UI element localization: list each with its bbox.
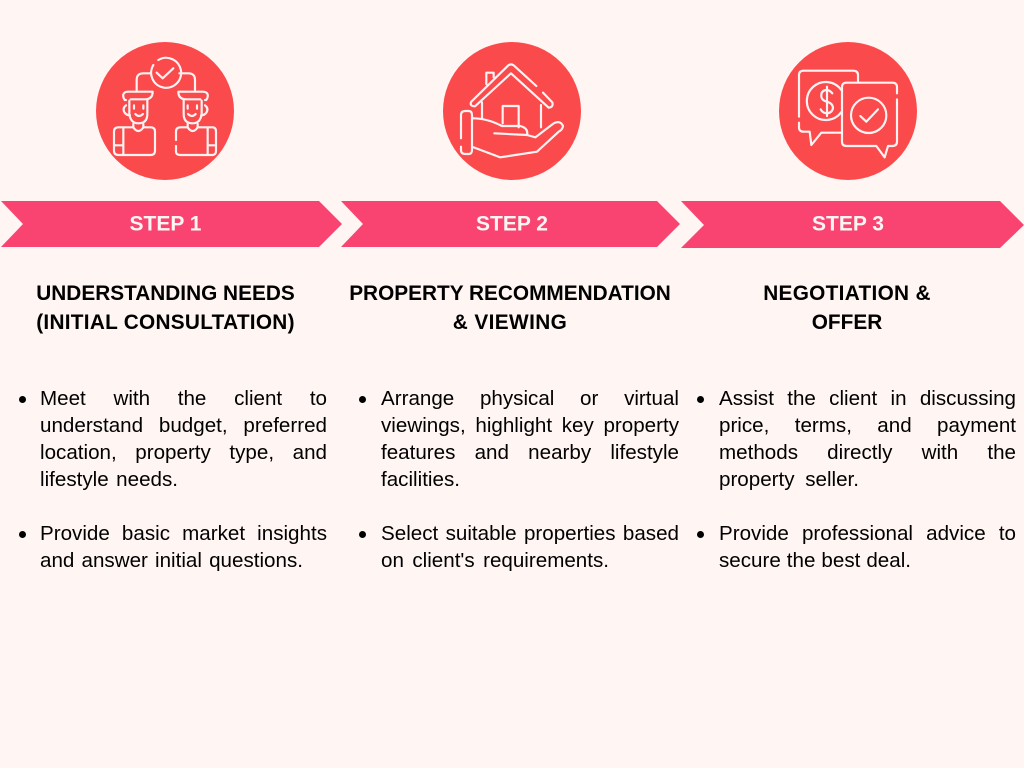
text block: step 2 bullets: facilities. xyxy=(381,468,460,491)
text block: step 1 bullets xyxy=(19,387,327,572)
text block: step 3 bullets: price, terms, and payment xyxy=(719,414,1016,437)
heading: step 3 title xyxy=(763,282,931,334)
text block: step 2 bullets: features and nearby lifestyle xyxy=(381,441,679,464)
text block: step 3 bullets: secure the best deal. xyxy=(719,549,911,572)
text block: step 3 bullets xyxy=(697,387,1016,572)
heading: step 2 title: PROPERTY RECOMMENDATION xyxy=(349,282,671,304)
heading: step 3 title: NEGOTIATION & xyxy=(763,282,931,304)
text block: step 3 bullets: Provide professional advice to xyxy=(719,522,1016,545)
heading: step 2 title xyxy=(349,282,671,334)
heading: step 1 title: (INITIAL CONSULTATION) xyxy=(36,310,295,334)
banner: step 3 xyxy=(681,201,1024,248)
text block: step 2 bullets: viewings, highlight key property xyxy=(381,414,679,437)
icon: price negotiation speech bubbles xyxy=(779,42,917,180)
text block: step 2 bullets: Arrange physical or virtual xyxy=(381,387,679,410)
text block: step 1 bullets: Meet with the client to xyxy=(40,387,327,410)
text block: step 2 bullets: Select suitable properties based xyxy=(381,522,679,545)
heading: step 2 title: & VIEWING xyxy=(453,310,567,334)
text block: step 2 bullets: on client's requirements. xyxy=(381,549,609,572)
text block: step 1 bullets: understand budget, preferred xyxy=(40,414,327,437)
icon: two people agreeing xyxy=(96,42,234,180)
banner: step 1 xyxy=(1,201,342,247)
text block: step 1 bullets: lifestyle needs. xyxy=(40,468,178,491)
heading: step 1 title: UNDERSTANDING NEEDS xyxy=(36,282,295,304)
text block: step 3 bullets: Assist the client in discussing xyxy=(719,387,1016,410)
heading: step 3 title: OFFER xyxy=(812,310,882,334)
heading: step 1 title xyxy=(36,282,295,334)
icon: house on hand xyxy=(443,42,581,180)
banner: step 1: STEP 1 xyxy=(130,212,202,236)
text block: step 2 bullets xyxy=(359,387,679,572)
text block: step 1 bullets: location, property type, and xyxy=(40,441,327,464)
text block: step 3 bullets: property seller. xyxy=(719,468,859,491)
text block: step 3 bullets: methods directly with the xyxy=(719,441,1016,464)
text block: step 1 bullets: and answer initial questions. xyxy=(40,549,303,572)
banner: step 3: STEP 3 xyxy=(812,212,884,236)
banner: step 2 xyxy=(341,201,680,247)
banner: step 2: STEP 2 xyxy=(476,212,548,236)
text block: step 1 bullets: Provide basic market insights xyxy=(40,522,327,545)
